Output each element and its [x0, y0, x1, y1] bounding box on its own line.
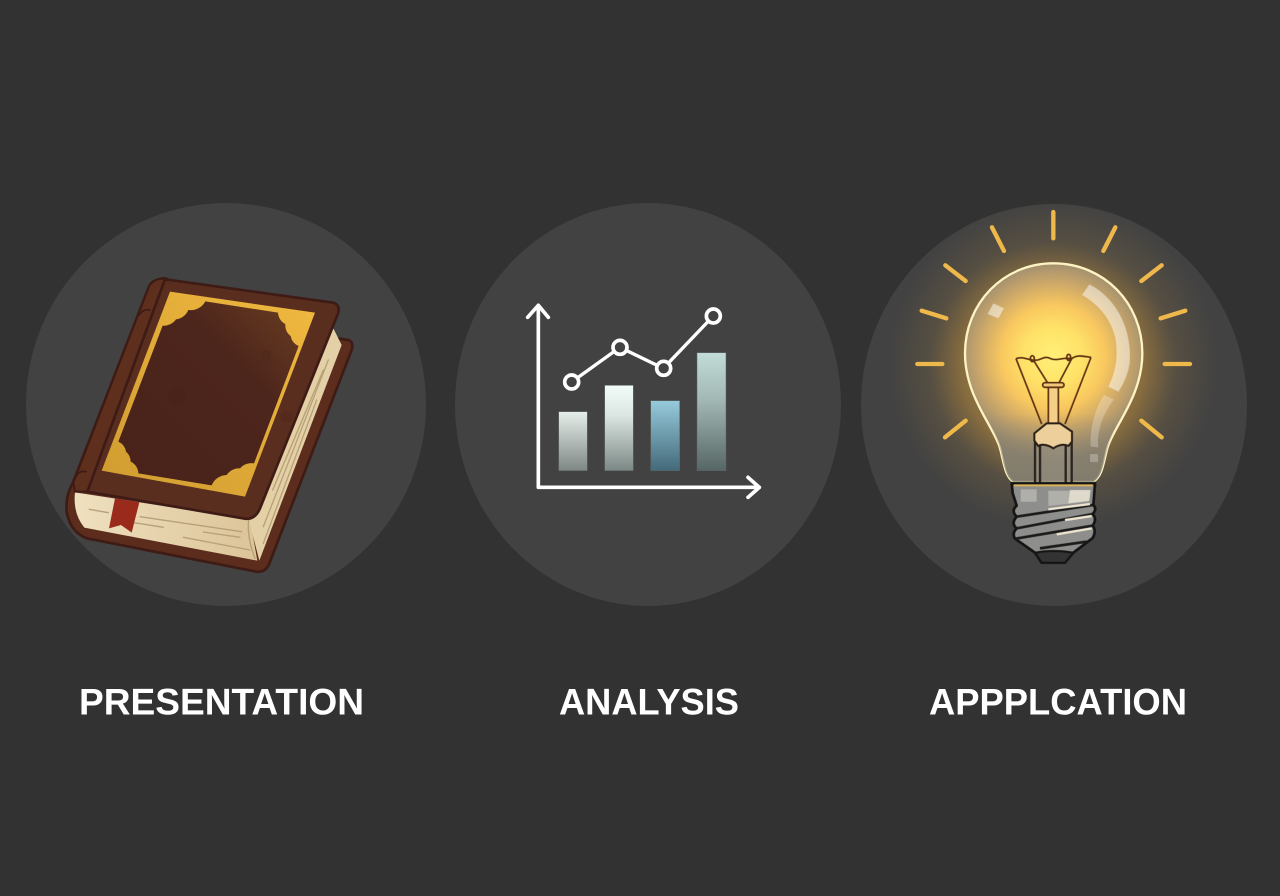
panel circle: presentation	[26, 203, 426, 606]
chart: bars and line	[528, 305, 759, 497]
page lines	[89, 360, 328, 558]
book side pages	[249, 328, 342, 561]
panel circle: application	[861, 204, 1247, 606]
spine bands	[76, 310, 150, 477]
stem collar	[1034, 423, 1072, 448]
base tip	[1035, 551, 1073, 563]
label: presentation: PRESENTATION	[79, 682, 364, 722]
spine	[73, 279, 165, 492]
book bottom pages	[75, 492, 257, 561]
base highlights	[1021, 489, 1090, 506]
label: application: APPPLCATION	[929, 682, 1187, 722]
front cover	[87, 279, 339, 519]
panel circle: analysis	[455, 203, 841, 606]
base thread highlights	[1048, 504, 1092, 534]
panel: analysis	[455, 203, 841, 606]
screw base	[1012, 483, 1095, 563]
panel: presentation	[26, 203, 426, 606]
gold frame	[102, 292, 315, 497]
trend points	[565, 309, 720, 389]
book back cover	[66, 278, 352, 572]
base thread lines	[1016, 505, 1093, 548]
icon: light bulb	[917, 212, 1190, 563]
filament	[1016, 354, 1091, 424]
lower stem tubes	[1035, 443, 1072, 483]
cover inner panel	[118, 301, 299, 485]
glass	[965, 263, 1142, 482]
glass lower shade	[985, 413, 1122, 482]
bookmark	[109, 498, 139, 533]
bars	[559, 353, 726, 471]
label: analysis: ANALYSIS	[559, 682, 739, 722]
glass highlights	[988, 284, 1130, 462]
panel: application	[861, 200, 1247, 606]
trend line	[572, 316, 713, 382]
base rim	[1014, 482, 1093, 488]
bulb outer glow	[888, 200, 1218, 530]
cover stains	[167, 350, 293, 423]
filament stem	[1048, 387, 1058, 423]
axes with arrows	[528, 305, 759, 497]
icon: book	[66, 278, 352, 572]
light rays	[917, 212, 1190, 437]
